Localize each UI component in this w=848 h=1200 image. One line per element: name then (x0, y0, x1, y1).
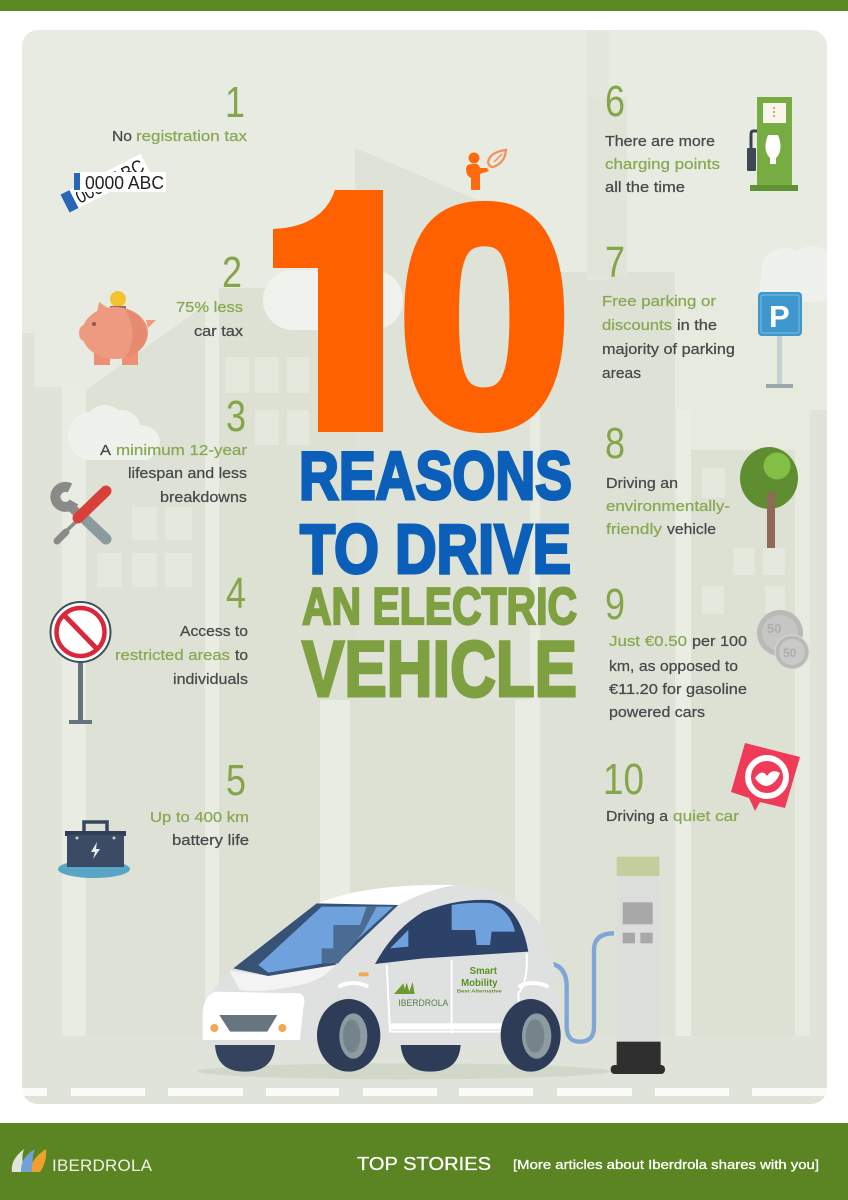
door text: Smart Mobility: Mobility (461, 978, 498, 989)
reason 2: car tax (194, 323, 244, 340)
door lines (387, 953, 527, 1033)
cloud: centre (263, 270, 403, 330)
footer logo: Iberdrola flames (12, 1149, 46, 1172)
charging post (611, 857, 665, 1074)
icon: parking sign (758, 292, 802, 388)
icon: no noise speech bubble (731, 743, 800, 811)
icon: parking sign: P (769, 299, 790, 334)
reason 6: 6 (605, 77, 625, 126)
reason 7 (602, 238, 735, 382)
footer note: [More articles about Iberdrola shares with you] (513, 1157, 819, 1172)
reason 4: 4 (226, 569, 246, 618)
reason 2: 75% less (176, 299, 243, 316)
title: reasons to drive an electric vehicle: TO DRIVE (300, 510, 571, 588)
icon: battery (58, 822, 130, 878)
reason 5: 5 (226, 756, 246, 805)
title: big orange 10 (273, 190, 564, 433)
reason 3: breakdowns (160, 489, 247, 506)
door text: Smart Mobility: Best Alternative (457, 988, 502, 993)
icon: licence plates: 0000 ABC (73, 156, 148, 208)
door logo: Iberdrola: IBERDROLA (398, 998, 448, 1008)
door logo: Iberdrola (394, 982, 448, 1008)
reason 6 (605, 77, 720, 196)
reason 7: 7 (605, 238, 625, 287)
reason 10: 10 (603, 755, 644, 804)
icon: tree (740, 447, 798, 548)
reason 9: per 100 (692, 633, 747, 650)
reason 2 (176, 248, 244, 340)
charging cable (537, 933, 614, 1042)
icon: coins: 50 (783, 646, 797, 660)
footer heading: TOP STORIES (357, 1154, 491, 1174)
reason 4 (115, 569, 248, 688)
reason 8: vehicle (667, 521, 716, 538)
reason 4: to (235, 647, 248, 664)
reason 8: 8 (605, 419, 625, 468)
reason 9: km, as opposed to (609, 658, 738, 675)
reason 10 (603, 755, 739, 825)
reason 3: 3 (226, 392, 246, 441)
reason 5: battery life (172, 832, 249, 849)
icon: no entry sign (50, 602, 110, 724)
icon: piggy bank (79, 291, 156, 365)
rear wheel (501, 999, 561, 1072)
side windows (375, 900, 528, 964)
reason 4: individuals (173, 671, 248, 688)
reason 8: environmentally- (606, 498, 730, 515)
ground shadow (197, 1063, 610, 1079)
reason 1: registration tax (136, 128, 248, 145)
cloud: left (68, 405, 160, 460)
reason 8: friendly (606, 521, 663, 538)
reason 1: 1 (225, 78, 245, 127)
title: reasons to drive an electric vehicle: REASONS (299, 438, 572, 514)
reason 9: Just €0.50 (609, 633, 687, 650)
icon: person holding a leaf (466, 150, 506, 190)
reason 9: powered cars (609, 704, 705, 721)
footer (0, 1123, 848, 1200)
reason 7: discounts (602, 317, 672, 334)
reason 1 (112, 78, 248, 145)
reason 6: charging points (605, 156, 720, 173)
far wheels (215, 1045, 275, 1072)
reason 9: €11.20 for gasoline (609, 681, 747, 698)
top green bar (0, 0, 848, 11)
reason 7: majority of parking (602, 341, 735, 358)
icon: coins: 50 (767, 621, 781, 636)
reason 3: minimum 12-year (116, 442, 247, 459)
reason 9: 9 (605, 580, 625, 629)
title: reasons to drive an electric vehicle: AN ELECTRIC (302, 578, 577, 636)
reason 6: all the time (605, 179, 685, 196)
cloud: right (760, 246, 834, 302)
front wheel (317, 999, 380, 1072)
footer logo wordmark: IBERDROLA (52, 1156, 153, 1175)
door text: Smart Mobility (457, 966, 502, 993)
title: reasons to drive an electric vehicle: VEHICLE (302, 624, 577, 713)
door text: Smart Mobility: Smart (470, 966, 498, 977)
icon: charging station (747, 97, 798, 191)
reason 6: There are more (605, 133, 715, 150)
reason 7: Free parking or (602, 293, 716, 310)
white roof and front panels (317, 885, 457, 905)
front grille and lamps (210, 972, 369, 1032)
reason 8 (605, 419, 730, 538)
wheel arch highlights (340, 983, 547, 986)
reason 3: A (100, 442, 111, 459)
title: big orange 10: 1 (240, 116, 435, 507)
reason 10: quiet car (673, 808, 739, 825)
reason 8: Driving an (606, 475, 678, 492)
reason 4: restricted areas (115, 647, 230, 664)
reason 7: areas (602, 365, 641, 382)
illustration: electric car and charging post (197, 857, 665, 1079)
reason 4: Access to (180, 623, 248, 640)
icon: wrench and screwdriver (55, 487, 106, 541)
reason 9 (605, 580, 747, 721)
reason 3 (100, 392, 247, 506)
car body (203, 885, 561, 1043)
reason 1: No (112, 128, 132, 145)
reason 2: 2 (222, 248, 242, 297)
reason 10: Driving a (606, 808, 669, 825)
reason 3: lifespan and less (128, 465, 247, 482)
windscreen (233, 903, 398, 976)
icon: licence plates: 0000 ABC (85, 173, 164, 193)
title: reasons to drive an electric vehicle (299, 438, 577, 713)
reason 7: in the (677, 317, 717, 334)
title: big orange 10: 0 (398, 142, 571, 490)
reason 5 (150, 756, 249, 849)
reason 5: Up to 400 km (150, 809, 249, 826)
icon: coins (757, 610, 809, 669)
